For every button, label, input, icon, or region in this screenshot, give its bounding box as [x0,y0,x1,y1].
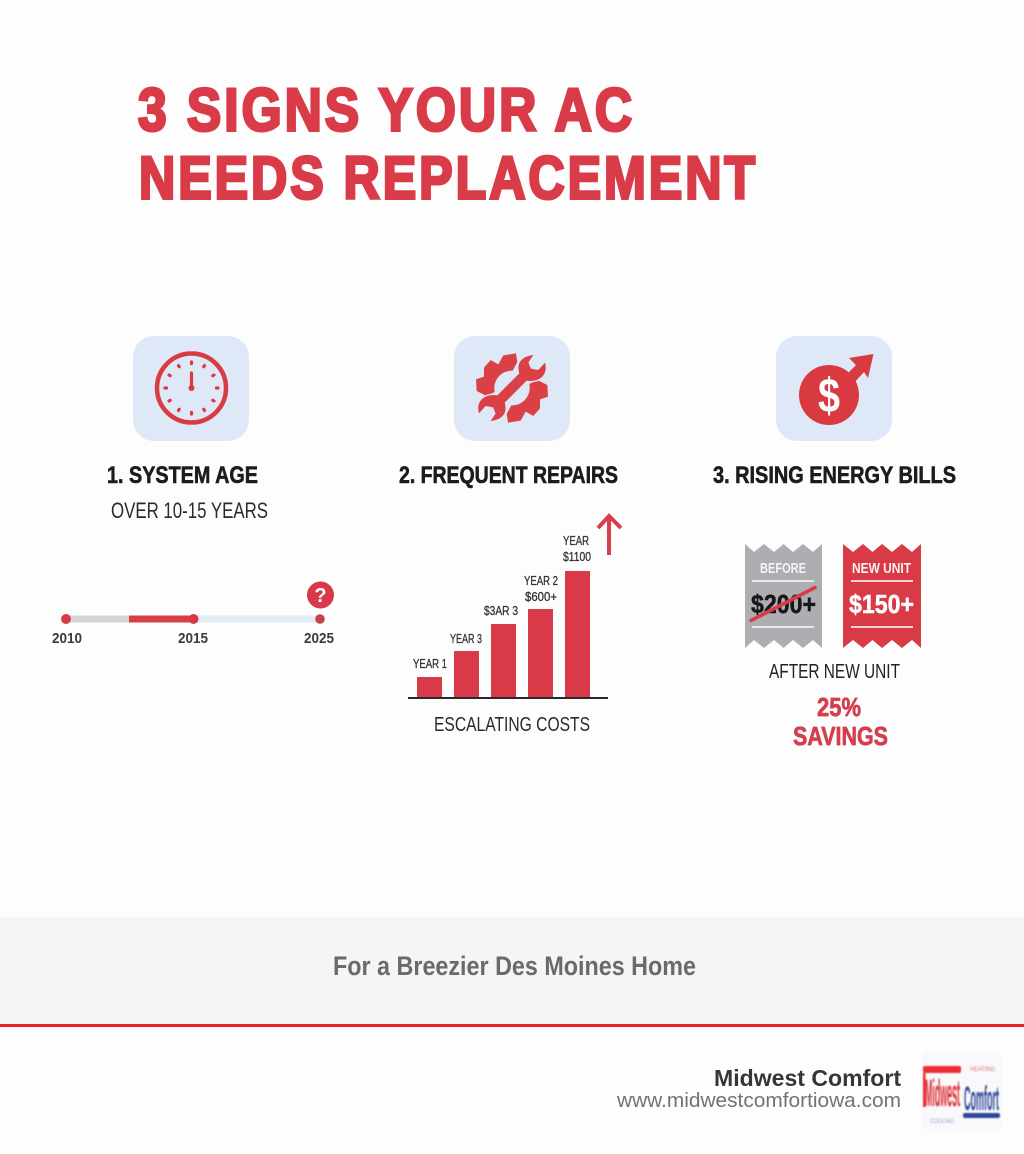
bar chart: escalating costs: $3AR 3 [484,603,518,618]
receipt: before: $200+ [751,589,816,619]
tagline band: For a Breezier Des Moines Home [333,951,696,981]
icon: dollar with arrow [776,336,892,441]
receipt: new unit: $150+ [849,589,914,619]
arrow: rising costs [598,516,621,555]
title: NEEDS REPLACEMENT [139,144,758,212]
timeline chart: 2010 [52,630,82,647]
panel: rising energy bills [713,336,956,751]
callout: 25% savings: 25% [817,694,861,722]
receipt: new unit [843,544,921,648]
website: www.midwestcomfortiowa.com [616,1090,901,1112]
bar chart: escalating costs: YEAR 2 [524,573,558,588]
icon: clock [133,336,249,441]
logo [922,1052,1002,1130]
heading: frequent repairs: 2. FREQUENT REPAIRS [399,462,618,489]
bar chart: escalating costs [408,516,621,736]
bar chart: escalating costs: YEAR [563,533,589,548]
logo: COOLING [930,1119,954,1125]
bar chart: escalating costs: $600+ [525,589,557,604]
label: escalating costs: ESCALATING COSTS [434,714,590,736]
title: 3 SIGNS YOUR AC [138,76,635,144]
receipt: before [745,544,822,648]
timeline chart [52,582,334,647]
panel: system age [52,336,334,647]
timeline chart: 2025 [304,630,334,647]
timeline chart: 2015 [178,630,208,647]
footer brand [616,1052,1002,1130]
panel: frequent repairs [399,336,621,736]
bar chart: escalating costs: YEAR 3 [450,631,482,646]
callout: 25% savings: SAVINGS [793,723,888,751]
label: after new unit: AFTER NEW UNIT [769,660,900,683]
receipt: new unit: NEW UNIT [852,560,911,577]
title [138,76,758,212]
icon: gear and wrench [454,336,570,441]
logo: HEATING [970,1067,995,1073]
tagline band [0,917,1024,1027]
heading: rising energy bills: 3. RISING ENERGY BILLS [713,462,956,489]
icon: dollar with arrow: $ [818,370,840,423]
icon: question mark: ? [314,585,327,607]
bar chart: escalating costs: $1100 [563,549,591,564]
subheading: over 10-15 years: OVER 10-15 YEARS [111,498,268,523]
icon: question mark [307,582,334,608]
company name: Midwest Comfort [714,1065,901,1091]
bar chart: escalating costs: YEAR 1 [413,656,447,671]
callout: 25% savings [793,694,888,751]
heading: system age: 1. SYSTEM AGE [107,462,258,489]
receipt: before: BEFORE [760,560,806,577]
